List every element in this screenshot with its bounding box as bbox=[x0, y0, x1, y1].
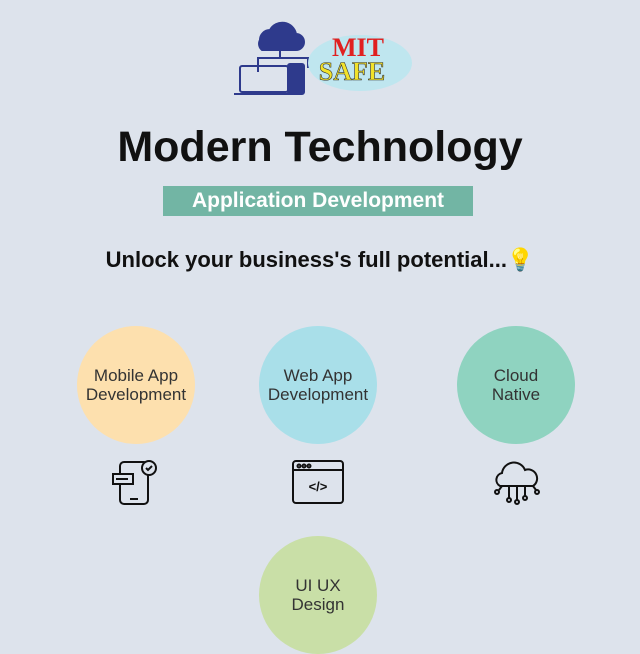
circle: cloud bbox=[457, 326, 575, 444]
logo: SAFE bbox=[319, 57, 385, 86]
circle: cloud: Cloud bbox=[494, 366, 538, 385]
circle: web: Web App bbox=[284, 366, 352, 385]
logo text: MIT bbox=[332, 33, 384, 62]
circle: mobile: Development bbox=[86, 385, 186, 404]
banner bbox=[163, 186, 473, 216]
circle: ui ux: UI UX bbox=[295, 576, 341, 595]
circle: web: Development bbox=[268, 385, 368, 404]
icon: web code: </> bbox=[309, 479, 328, 494]
circle: mobile bbox=[77, 326, 195, 444]
cloud background bbox=[308, 35, 412, 91]
title: Modern Technology bbox=[117, 123, 523, 171]
circle: ui ux: Design bbox=[292, 595, 344, 614]
banner: Application Development bbox=[192, 189, 444, 212]
circle: web bbox=[259, 326, 377, 444]
circle: cloud: Native bbox=[492, 385, 540, 404]
logo bbox=[234, 22, 412, 95]
icon: mobile bbox=[112, 460, 157, 505]
icon: cloud bbox=[494, 462, 540, 505]
circle: mobile: Mobile App bbox=[94, 366, 178, 385]
icon: cloud network bbox=[234, 23, 308, 94]
icon: web code bbox=[292, 460, 344, 504]
subtitle: Unlock your business's full potential...💡 bbox=[106, 247, 534, 272]
circle: ui ux bbox=[259, 536, 377, 654]
